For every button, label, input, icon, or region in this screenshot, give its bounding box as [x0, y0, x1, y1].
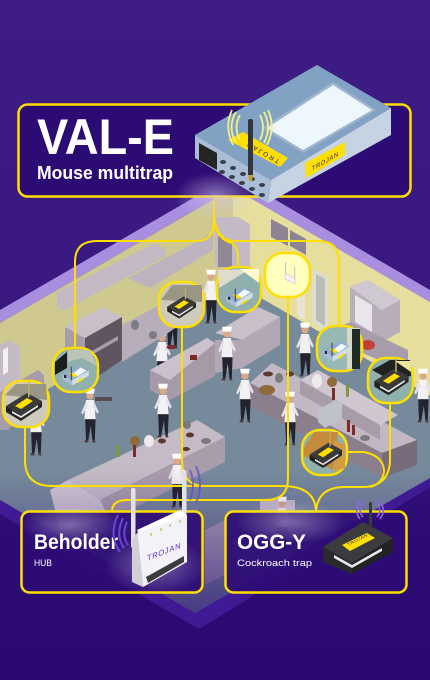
- logo text: TROJAN: [246, 140, 281, 164]
- heading: OGG-Y: OGG-Y: [237, 531, 306, 554]
- connector lines: [25, 195, 390, 511]
- subtitle: Mouse multitrap: Mouse multitrap: [37, 163, 173, 183]
- location marker: mouse trap back: [217, 267, 261, 312]
- card: VAL-E: [18, 104, 410, 220]
- card: OGG-Y: [226, 500, 406, 592]
- location marker: hub: [265, 253, 310, 297]
- label: HUB: HUB: [34, 558, 52, 568]
- device: VAL-E multitrap: [195, 65, 391, 203]
- back chefs: [153, 295, 314, 384]
- chef figures: [27, 270, 430, 550]
- location marker: cockroach trap right: [368, 358, 413, 403]
- heading: Beholder: Beholder: [34, 531, 118, 554]
- room shell: [0, 175, 430, 629]
- device: Beholder hub: [113, 466, 200, 587]
- location marker: mouse trap left: [53, 348, 98, 392]
- floor shade: [0, 470, 430, 613]
- location marker: cockroach trap left: [3, 381, 49, 427]
- location marker: mouse trap right: [317, 326, 362, 371]
- label: Cockroach trap: Cockroach trap: [237, 558, 312, 569]
- kitchen items on counters: [117, 320, 375, 457]
- device: OGG-Y trap: [323, 500, 393, 574]
- hub logo text: TROJAN: [147, 541, 181, 563]
- location marker: cockroach trap back: [159, 282, 204, 327]
- logo text side: TROJAN: [312, 151, 338, 173]
- trap logo text: TROJAN: [347, 533, 368, 547]
- location marker: cockroach trap bottom: [302, 430, 347, 475]
- wifi arcs: [228, 110, 272, 145]
- kitchen furniture: [0, 217, 417, 585]
- card: Beholder: [20, 505, 205, 595]
- title: VAL-E: VAL-E: [37, 109, 174, 165]
